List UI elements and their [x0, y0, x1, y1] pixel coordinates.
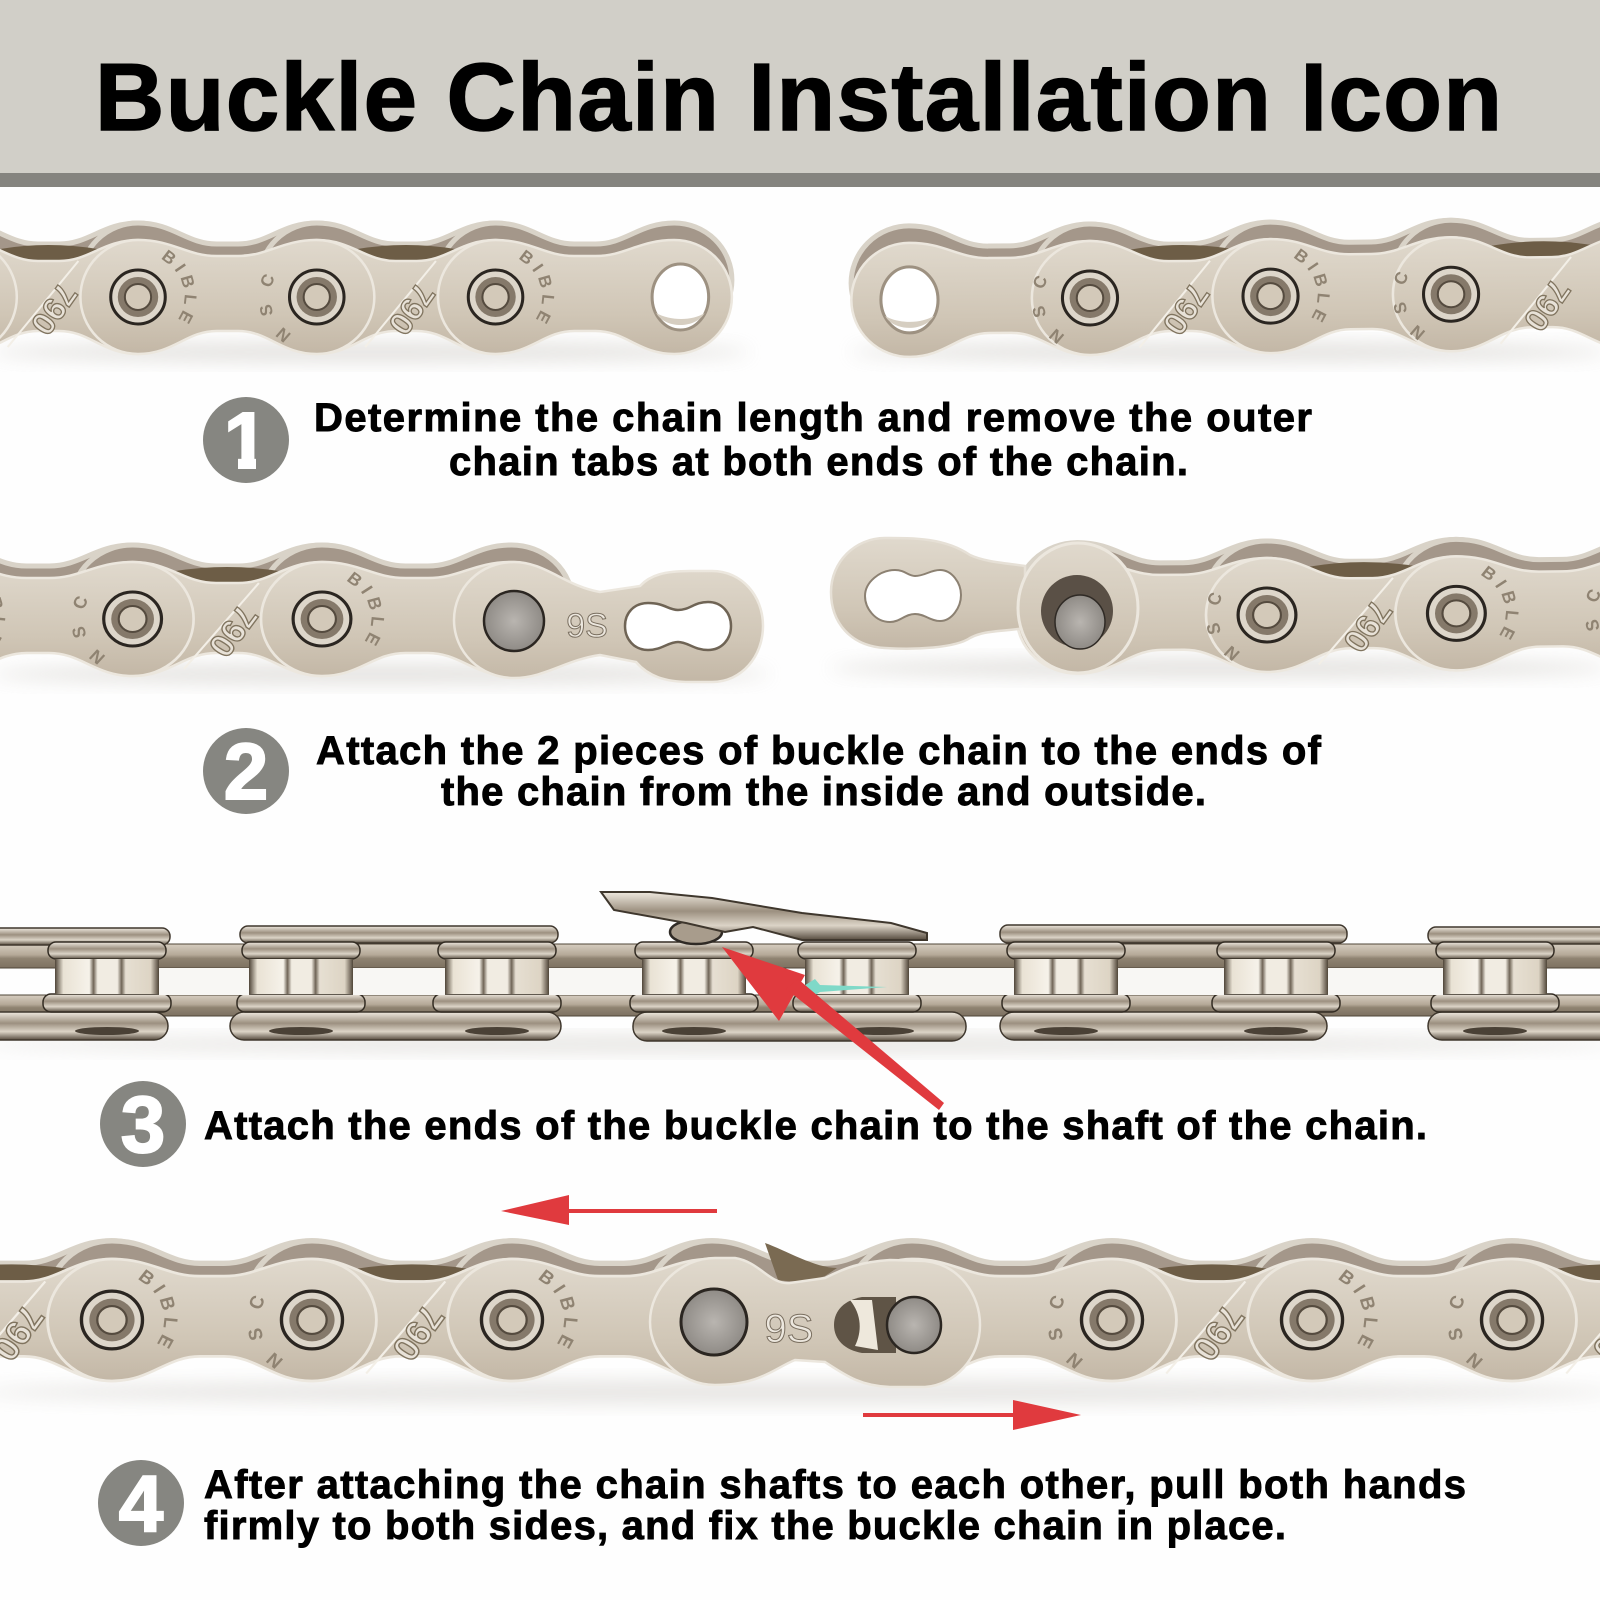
outer top plates: [0, 925, 1600, 945]
step 1 text: Determine the chain length and remove the outer: [314, 396, 1312, 440]
step 4 badge: 4: [119, 1459, 164, 1548]
step 2 text: [316, 729, 1322, 814]
step 1 badge: [203, 396, 289, 485]
step 4 badge: [98, 1459, 184, 1548]
raised buckle plate: [601, 892, 927, 944]
gaps between rollers: [159, 968, 1443, 995]
step 1 text: chain tabs at both ends of the chain.: [449, 440, 1188, 484]
step 4 text: After attaching the chain shafts to each other, pull both hands: [204, 1463, 1466, 1507]
buckle plate and pin: [831, 538, 1138, 673]
arrow: points to the pin: [722, 947, 944, 1110]
arrow: pull right: [863, 1400, 1081, 1430]
title: Buckle Chain Installation Icon: [95, 44, 1502, 151]
buckle plate with keyhole: [454, 562, 763, 682]
chain photo: step 1 right piece: [850, 218, 1600, 362]
outer bottom plates: [0, 1012, 1600, 1041]
buckle plate with keyhole: 9S: [566, 607, 608, 645]
step 4 text: firmly to both sides, and fix the buckle chain in place.: [204, 1504, 1286, 1548]
step 1 text: [314, 396, 1312, 484]
rollers: [43, 942, 1559, 1012]
step 2 badge: 2: [224, 727, 268, 816]
step 3 badge: 3: [121, 1080, 165, 1169]
chain photo: step 2 right piece with buckle plate: [830, 537, 1600, 678]
step 2 badge: [203, 727, 289, 816]
chain photo: step 2 left piece with buckle plate: [0, 545, 770, 684]
chain photo: step 1 left piece: [0, 223, 750, 362]
buckle link: 9S: [765, 1307, 813, 1351]
step 3 badge: [100, 1080, 186, 1169]
inner connecting bars: [0, 944, 1600, 1016]
step 3 text: Attach the ends of the buckle chain to the shaft of the chain.: [204, 1104, 1427, 1148]
step 2 text: the chain from the inside and outside.: [441, 770, 1206, 814]
arrow: pull left: [501, 1195, 717, 1225]
step 4 text: [204, 1463, 1466, 1548]
step 1 badge: 1: [224, 396, 268, 485]
holes on lower plates: [75, 1027, 1527, 1035]
teal fleck: [802, 979, 887, 998]
chain side view: step 3: [0, 892, 1600, 1052]
chain photo: step 4 joined chain: [0, 1241, 1600, 1404]
buckle link: [650, 1243, 980, 1387]
header banner: [0, 0, 1600, 187]
step 2 text: Attach the 2 pieces of buckle chain to the ends of: [316, 729, 1322, 773]
